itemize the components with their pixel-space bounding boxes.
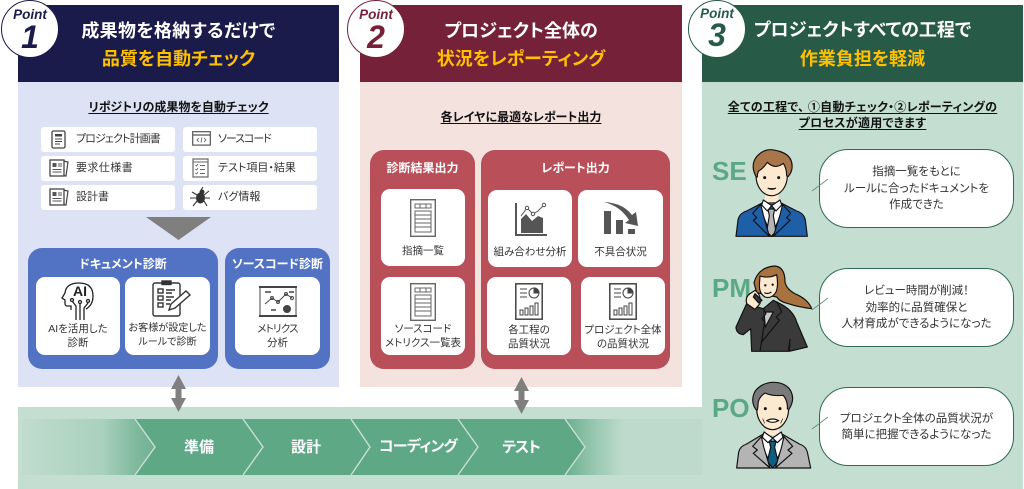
icon: report sheet	[609, 283, 637, 320]
label: PM: PM	[712, 273, 751, 303]
heading: point 1: 品質を自動チェック	[102, 49, 255, 69]
subheading: report: 各レイヤに最適なレポート出力	[441, 110, 601, 124]
card: metrics list	[381, 277, 465, 355]
heading: point 1: 成果物を格納するだけで	[81, 21, 276, 41]
header: point 2	[360, 5, 682, 82]
item: バグ情報	[183, 185, 317, 210]
icon: list sheet	[410, 199, 436, 237]
caption: 指摘一覧	[402, 245, 444, 257]
label: SE: SE	[712, 156, 747, 186]
card: 指摘一覧	[381, 189, 465, 266]
icon: falling bars	[604, 202, 638, 234]
callout: PM: 人材育成ができるようになった	[841, 318, 992, 330]
heading: point 2: プロジェクト全体の	[444, 21, 598, 41]
step: 準備: 準備	[184, 439, 214, 456]
badge label: Point	[700, 6, 734, 21]
step: コーディング: コーディング	[379, 438, 457, 455]
arrow: down triangle	[146, 217, 211, 240]
card: combined analysis	[488, 190, 572, 267]
caption: プロジェクト全体	[584, 324, 662, 336]
caption	[584, 324, 662, 350]
heading: point 3: 作業負担を軽減	[800, 49, 925, 69]
caption: 分析	[267, 337, 288, 349]
caption: の品質状況	[597, 338, 649, 350]
caption: お客様が設定した	[128, 323, 207, 334]
item: テスト項目・結果	[183, 156, 317, 181]
label: 要求仕様書	[76, 162, 133, 174]
heading: point 3	[754, 20, 971, 69]
panel: point 3	[702, 5, 1023, 489]
header: point 1	[18, 5, 339, 82]
label: プロジェクト計画書	[76, 133, 160, 145]
caption	[508, 324, 550, 350]
label: PO: PO	[712, 393, 750, 423]
step: 設計: 設計	[291, 439, 321, 456]
subheading: all processes: 全ての工程で、 ①自動チェック・②レポーティングの	[728, 100, 997, 114]
callout tails	[812, 178, 828, 430]
panel: point 2	[360, 5, 682, 387]
card: defect status	[578, 190, 663, 267]
icon: code window	[192, 131, 211, 146]
panel: point 1	[18, 5, 339, 387]
caption: 診断	[68, 337, 88, 349]
item: プロジェクト計画書	[41, 127, 175, 152]
caption: ソースコード	[395, 323, 451, 335]
caption	[128, 322, 207, 348]
callout: SE	[819, 149, 1014, 228]
arrow: up-down 1	[171, 375, 186, 412]
icon: AI head: AI	[73, 283, 87, 299]
label: ソースコード	[218, 133, 271, 145]
callout: PM: 効率的に品質確保と	[866, 302, 967, 314]
callout: PM	[819, 268, 1014, 347]
callout: SE: 作成できた	[889, 199, 944, 211]
caption	[257, 323, 298, 349]
box heading: ソースコード診断	[232, 257, 323, 271]
badge label: Point	[359, 7, 393, 22]
caption: 組み合わせ分析	[494, 246, 566, 258]
badge number: 2	[367, 19, 385, 55]
caption: 不具合状況	[594, 246, 647, 258]
callout: SE: 指摘一覧をもとに	[872, 166, 961, 178]
icon: metrics board	[259, 286, 297, 317]
box: diagnosis output	[370, 150, 475, 369]
card: AI	[36, 277, 120, 355]
card: metrics	[235, 277, 320, 355]
icon: point 3 badge	[688, 0, 746, 58]
subheading: all processes	[728, 100, 998, 130]
icon: checklist	[192, 158, 209, 178]
badge number: 1	[21, 19, 39, 55]
icon: documents	[49, 159, 69, 177]
caption: メトリクス	[257, 323, 298, 335]
icon: AI head	[61, 282, 94, 320]
caption: AIを活用した	[48, 323, 108, 335]
caption	[385, 323, 461, 349]
box: source code diagnosis	[225, 248, 330, 369]
callout: PO: 簡単に把握できるようになった	[842, 429, 991, 441]
item: 要求仕様書	[41, 156, 175, 181]
item: ソースコード	[183, 127, 317, 152]
box heading: ドキュメント診断	[79, 257, 167, 271]
illustration: PM person	[735, 265, 812, 352]
card: project quality	[581, 277, 665, 355]
box heading: 診断結果出力	[386, 161, 458, 175]
icon: point 2 badge	[347, 0, 405, 58]
callout: PO: プロジェクト全体の品質状況が	[840, 412, 993, 424]
icon: clipboard pencil	[152, 280, 191, 317]
step: テスト: テスト	[502, 439, 540, 456]
caption: 品質状況	[508, 338, 550, 350]
item: 設計書	[41, 185, 175, 210]
header: point 3	[702, 5, 1023, 82]
subheading: all processes: プロセスが適用できます	[799, 116, 926, 130]
label: 設計書	[76, 191, 109, 203]
icon: report sheet	[515, 283, 543, 320]
icon: document	[51, 130, 66, 149]
illustration: PO person	[736, 382, 812, 469]
caption: 各工程の	[508, 324, 550, 336]
card: customer rules	[125, 277, 210, 355]
caption: ルールで診断	[138, 337, 197, 348]
callout: PO	[819, 387, 1014, 466]
badge label: Point	[13, 7, 47, 22]
label: バグ情報	[218, 191, 260, 203]
icon: list sheet	[410, 283, 436, 321]
icon: combined chart	[515, 202, 547, 236]
heading: point 2	[437, 21, 606, 69]
caption	[48, 323, 108, 349]
box: report output	[481, 150, 670, 369]
heading: point 2: 状況をレポーティング	[437, 49, 605, 69]
subheading: repository: リポジトリの成果物を自動チェック	[88, 100, 269, 114]
icon: bug	[190, 186, 210, 206]
illustration: SE person	[735, 149, 808, 237]
box: document diagnosis	[28, 248, 218, 369]
callout: PM: レビュー時間が削減！	[864, 285, 969, 297]
arrow: up-down 2	[514, 377, 529, 414]
caption: メトリクス一覧表	[385, 337, 461, 349]
process chevrons	[36, 419, 622, 475]
icon: documents	[49, 188, 69, 206]
heading: point 3: プロジェクトすべての工程で	[754, 20, 971, 40]
box heading: レポート出力	[541, 161, 610, 175]
panel: process band	[18, 407, 702, 489]
callout: SE: ルールに合ったドキュメントを	[844, 183, 989, 195]
heading: point 1	[81, 21, 276, 69]
icon: point 1 badge	[1, 0, 59, 58]
card: per process quality	[487, 277, 571, 355]
badge number: 3	[708, 17, 726, 53]
label: テスト項目・結果	[218, 162, 296, 174]
